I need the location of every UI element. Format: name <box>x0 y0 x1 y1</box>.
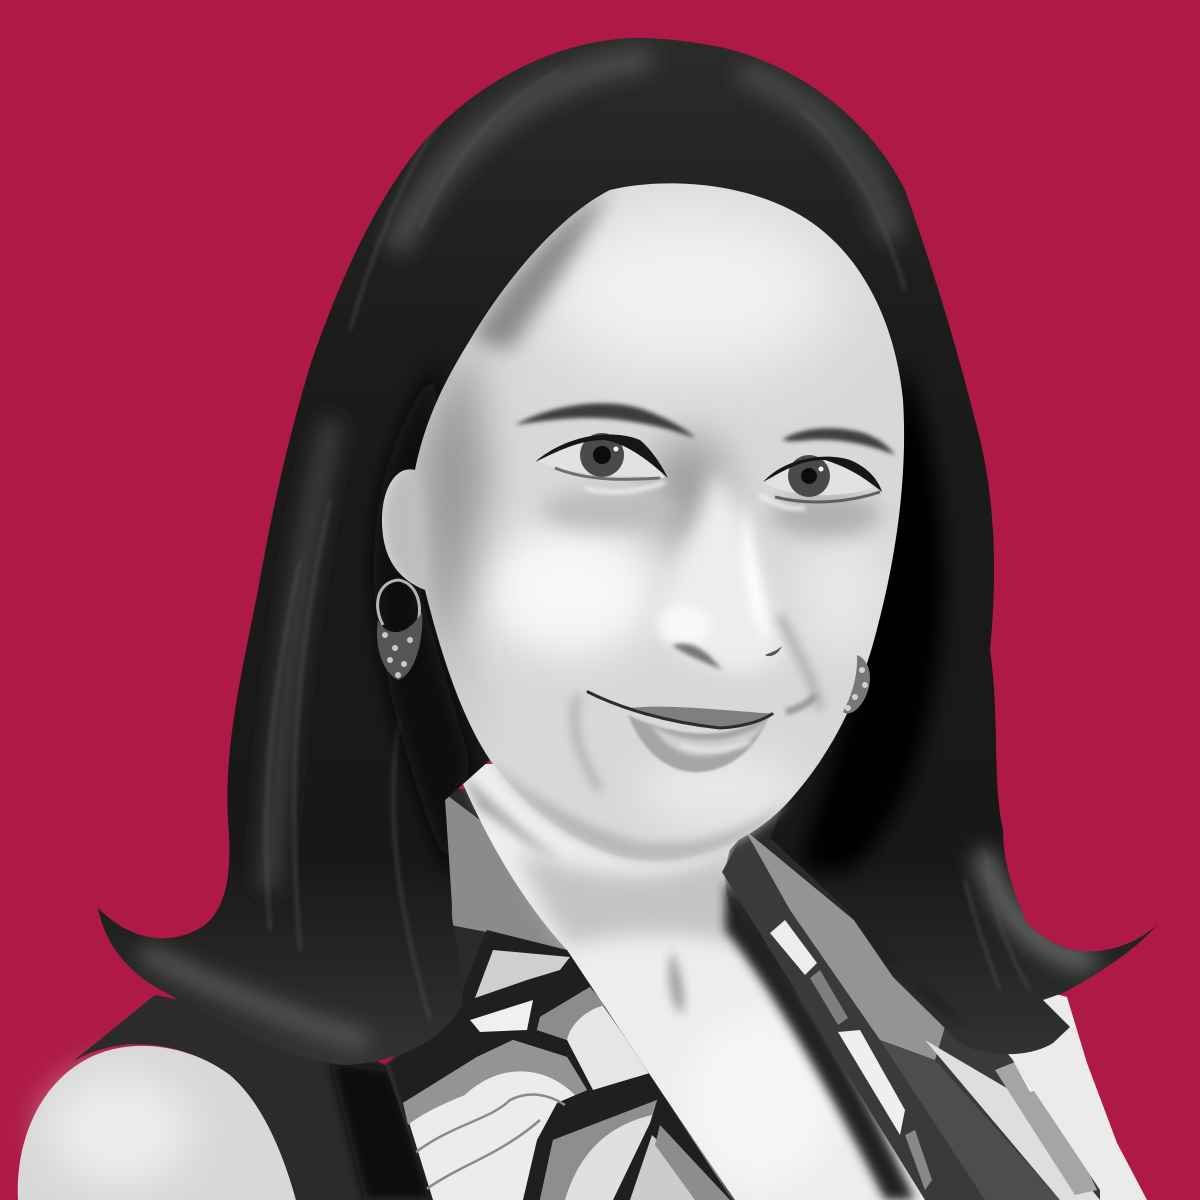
patch: last <box>630 1135 695 1200</box>
dark inner shadow near face <box>800 360 944 873</box>
patch: lower <box>540 1100 657 1200</box>
patch: small white <box>470 1000 533 1032</box>
clothing underlay <box>385 770 1100 1200</box>
gray fabric above scarf <box>440 790 580 955</box>
left scarf panel <box>380 920 740 1200</box>
hair <box>98 38 1158 1065</box>
ear <box>382 478 420 588</box>
right scarf panel <box>720 830 1120 1200</box>
left eye <box>535 433 668 492</box>
black sleeveless top <box>72 995 432 1200</box>
neck and chest <box>455 760 925 1200</box>
nose <box>655 470 785 673</box>
patch: big <box>403 1040 587 1200</box>
skin light and shadow <box>540 205 840 375</box>
face <box>382 183 904 861</box>
left eyebrow <box>515 403 695 438</box>
patch: middle <box>537 987 650 1090</box>
mouth <box>588 692 775 772</box>
hair highlights <box>150 60 1085 1040</box>
left earring <box>377 580 422 680</box>
right eyebrow <box>782 428 895 455</box>
right arm <box>1000 990 1147 1200</box>
chin shadow <box>490 760 790 861</box>
smile lines <box>574 695 600 790</box>
right eye <box>760 455 882 508</box>
patch: top <box>475 950 570 998</box>
left shoulder <box>18 1046 296 1200</box>
right earring <box>843 655 870 714</box>
